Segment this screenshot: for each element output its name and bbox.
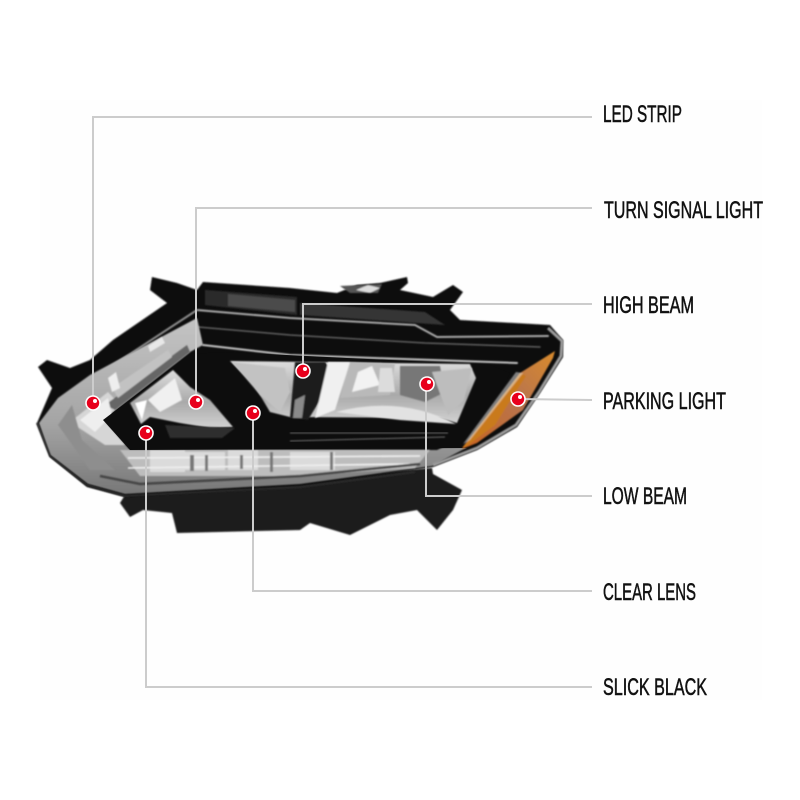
black interior xyxy=(103,352,510,450)
amber turn lens xyxy=(462,351,555,449)
leader line: slick black xyxy=(146,433,592,687)
marker: high beam xyxy=(296,364,310,378)
label: slick black: SLICK BLACK xyxy=(603,674,707,701)
leader line: clear lens xyxy=(253,413,592,591)
reflector details xyxy=(135,362,472,438)
marker: clear lens xyxy=(246,406,260,420)
label: clear lens: CLEAR LENS xyxy=(603,579,696,606)
chrome bezel xyxy=(433,328,562,465)
left outer edge xyxy=(37,423,415,496)
marker: turn signal light xyxy=(189,395,203,409)
leader line: turn signal light xyxy=(196,208,592,402)
label: high beam: HIGH BEAM xyxy=(603,292,694,319)
label: parking light: PARKING LIGHT xyxy=(603,388,726,415)
upper grey windows xyxy=(205,284,445,325)
marker: parking light xyxy=(511,392,525,406)
leader line: parking light xyxy=(518,399,592,400)
housing body xyxy=(37,277,563,497)
lower black band lines xyxy=(290,433,448,441)
left reflector xyxy=(130,370,233,428)
leader line: high beam xyxy=(303,304,592,371)
marker: slick black xyxy=(139,426,153,440)
label: low beam: LOW BEAM xyxy=(603,483,687,510)
lens details xyxy=(58,337,430,484)
leader line: low beam xyxy=(426,384,592,496)
marker: led strip xyxy=(86,396,100,410)
headlight assembly xyxy=(37,277,563,535)
lower housing xyxy=(120,468,462,535)
main reflector xyxy=(230,361,476,423)
clear lens band xyxy=(39,318,480,494)
chrome trim lines xyxy=(72,310,548,392)
marker: low beam xyxy=(420,377,434,391)
label: led strip: LED STRIP xyxy=(603,101,682,128)
leader line: led strip xyxy=(93,117,592,403)
